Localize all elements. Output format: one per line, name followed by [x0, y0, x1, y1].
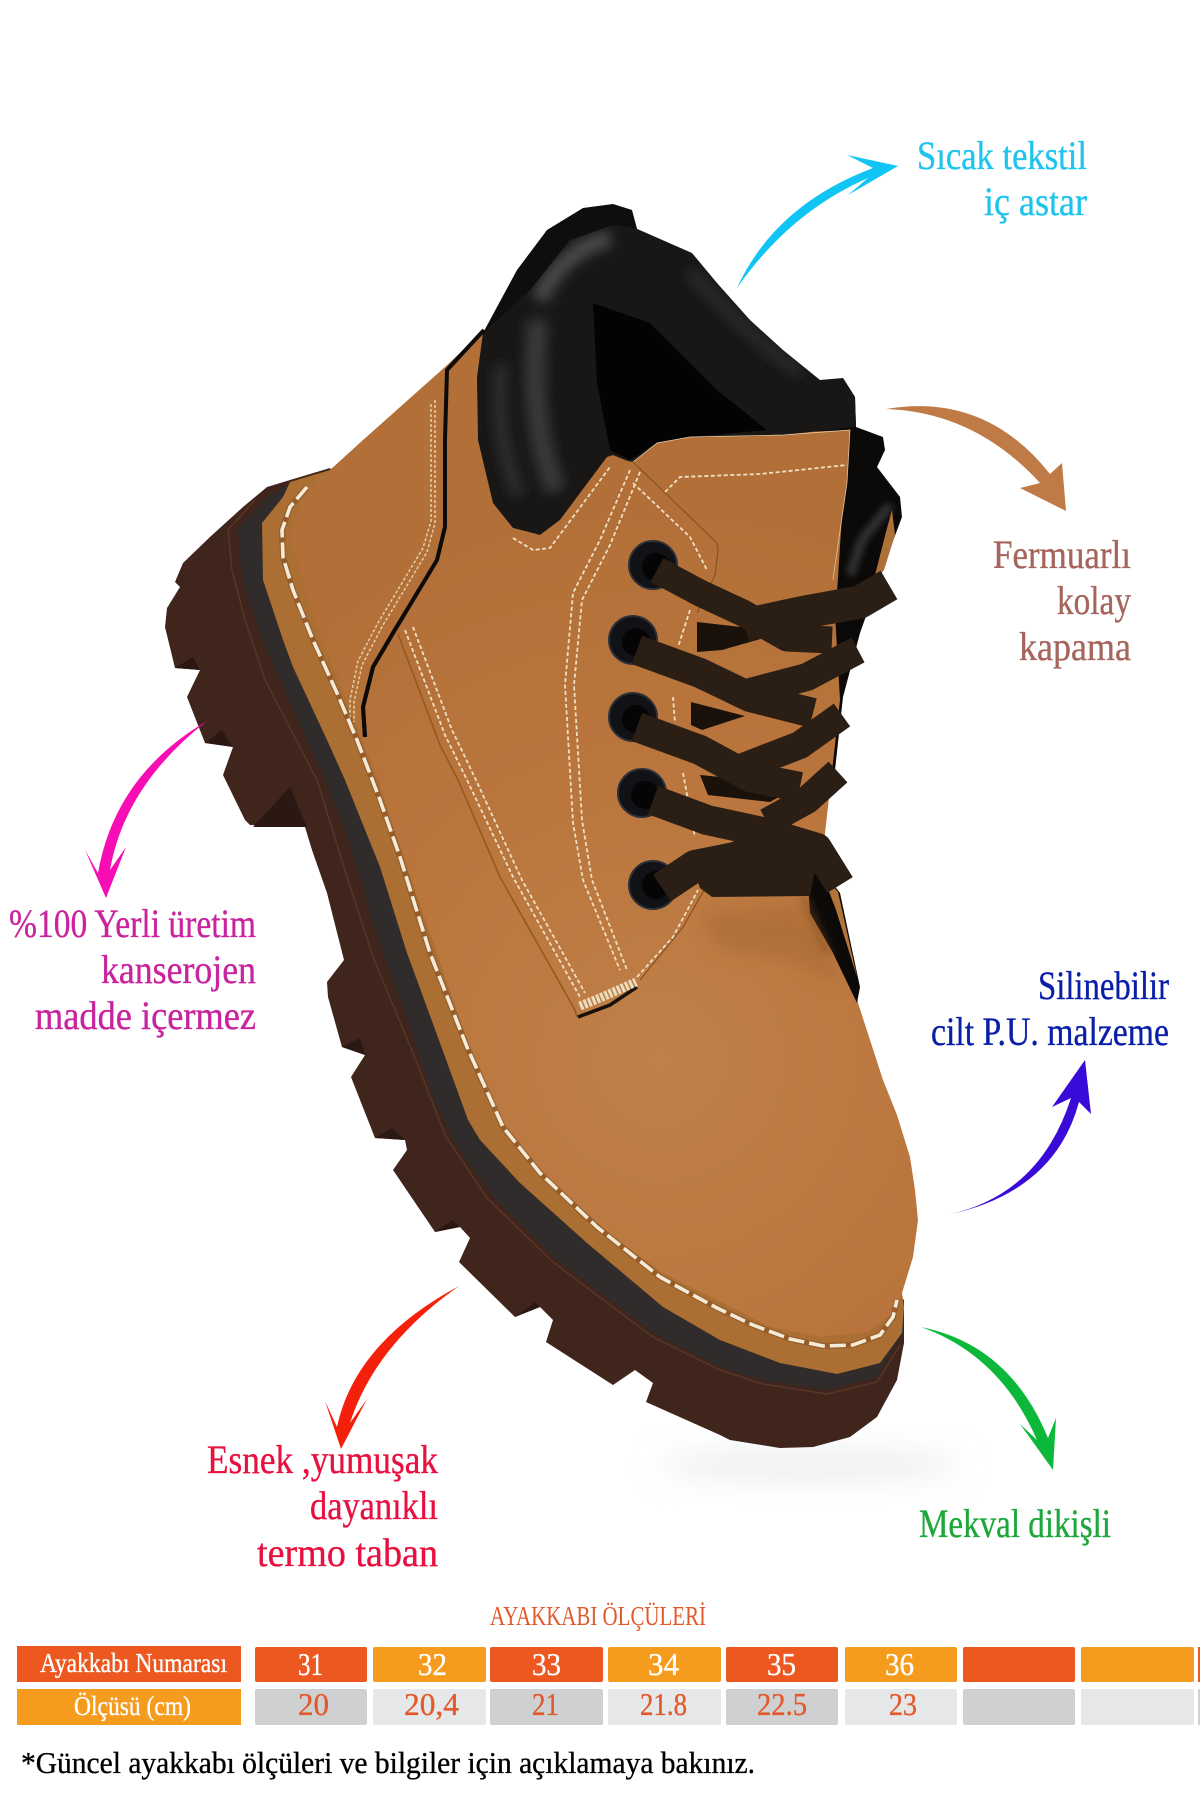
collar cavity: [593, 303, 767, 460]
lace panel stitching: [405, 467, 707, 997]
arrow: blue to label: [947, 1060, 1091, 1215]
label: stitching: Mekval dikişli: [919, 1501, 1111, 1546]
ground shadow: [660, 1447, 960, 1483]
zipper and tongue lining: [780, 378, 902, 860]
rear quarter stitching: [665, 465, 847, 492]
eyelet rings: [609, 541, 677, 909]
label line: kanserojen: [101, 947, 256, 992]
lace 2 left: [637, 650, 813, 713]
label line: Silinebilir: [1038, 963, 1169, 1008]
measurement cells: 21.8: [640, 1686, 687, 1722]
measurement cells: [255, 1686, 1200, 1725]
row header: measurement: Ölçüsü (cm): [74, 1691, 191, 1721]
label line: dayanıklı: [310, 1483, 438, 1528]
collar seam re-draw: [363, 440, 445, 737]
sole groove line: [228, 500, 900, 1394]
lace 2 right: [750, 650, 858, 692]
right tongue flap: [807, 870, 860, 1003]
boot illustration: [165, 204, 960, 1483]
measurement cells: 21: [532, 1686, 559, 1722]
label line: madde içermez: [35, 993, 256, 1038]
lug shadow wedges: [175, 657, 635, 1385]
label line: iç astar: [984, 179, 1087, 224]
arrow: pink to label: [85, 721, 207, 898]
measurement cells: 23: [889, 1686, 917, 1722]
welt stitching groove: [282, 487, 897, 1346]
label line: kolay: [1057, 578, 1131, 623]
arrow: red to label: [325, 1286, 459, 1449]
size cells: 32: [418, 1646, 447, 1682]
size cells: 36: [885, 1646, 914, 1682]
black midsole band: [238, 478, 904, 1390]
heel seam stitching: [350, 400, 435, 722]
label line: Sıcak tekstil: [917, 133, 1087, 178]
outsole with lugs: [165, 468, 904, 1448]
row header: measurement: [17, 1689, 241, 1725]
arrow: green to label: [921, 1327, 1056, 1470]
eyelet holes: [622, 553, 670, 899]
front lace panel: [398, 455, 718, 1017]
lace panel edge: [398, 634, 577, 1017]
rear quarter flap: [633, 430, 850, 640]
lace top right: [745, 585, 889, 625]
tan lining sliver: [873, 510, 895, 583]
seam: black heel line: [363, 330, 484, 737]
zipper lining highlight: [850, 505, 890, 575]
arrow: brown to zipper: [886, 406, 1066, 511]
leather upper: [290, 330, 918, 1337]
size cells: 34: [648, 1646, 679, 1682]
right edge of panel: [633, 462, 718, 980]
eyelets: [609, 541, 677, 909]
lower lace block: [690, 836, 815, 897]
welt stitching: [282, 487, 897, 1346]
collar back tab: [483, 204, 640, 340]
row header: shoe number: Ayakkabı Numarası: [40, 1648, 227, 1678]
lace 3 right: [743, 715, 842, 767]
stitch knot: [580, 982, 636, 1006]
tan flap lining: [822, 873, 857, 977]
size cells: 35: [767, 1646, 796, 1682]
collar gloss: [500, 238, 800, 495]
measurement cells: 22.5: [757, 1686, 807, 1722]
label: local production: [9, 901, 256, 1038]
flap shadow: [800, 895, 835, 958]
measurement cells: 20,4: [404, 1686, 459, 1722]
label line: Esnek ,yumuşak: [207, 1437, 438, 1482]
label line: termo taban: [257, 1530, 438, 1575]
label: zipper: [993, 532, 1131, 669]
lace 4 left: [653, 800, 840, 885]
size table: [17, 1646, 1200, 1725]
lace shadows below: [691, 622, 800, 802]
laces: [637, 570, 889, 897]
upper shading: [700, 905, 845, 985]
tan between laces: [685, 580, 840, 860]
lace top left: [657, 570, 832, 640]
label: warm lining: [917, 133, 1087, 224]
measurement cells: 20: [298, 1686, 329, 1722]
lace 3 left: [637, 727, 800, 787]
label line: kapama: [1019, 624, 1131, 669]
size table heading: AYAKKABI ÖLÇÜLERİ: [490, 1601, 706, 1631]
label: material: [931, 963, 1169, 1054]
lace 4 right: [767, 772, 838, 822]
tan welt: [262, 470, 904, 1374]
panel bottom dark edge: [578, 987, 637, 1017]
lace 5: [662, 858, 770, 888]
label: sole: [207, 1437, 438, 1575]
size cells: [255, 1646, 1200, 1682]
label line: %100 Yerli üretim: [9, 901, 256, 946]
footnote: *Güncel ayakkabı ölçüleri ve bilgiler için açıklamaya bakınız.: [21, 1745, 755, 1780]
arrow: cyan to lining: [737, 155, 898, 288]
padded black collar: [477, 225, 856, 535]
label line: Fermuarlı: [993, 532, 1131, 577]
size cells: 33: [532, 1646, 561, 1682]
size cells: 31: [298, 1646, 323, 1682]
